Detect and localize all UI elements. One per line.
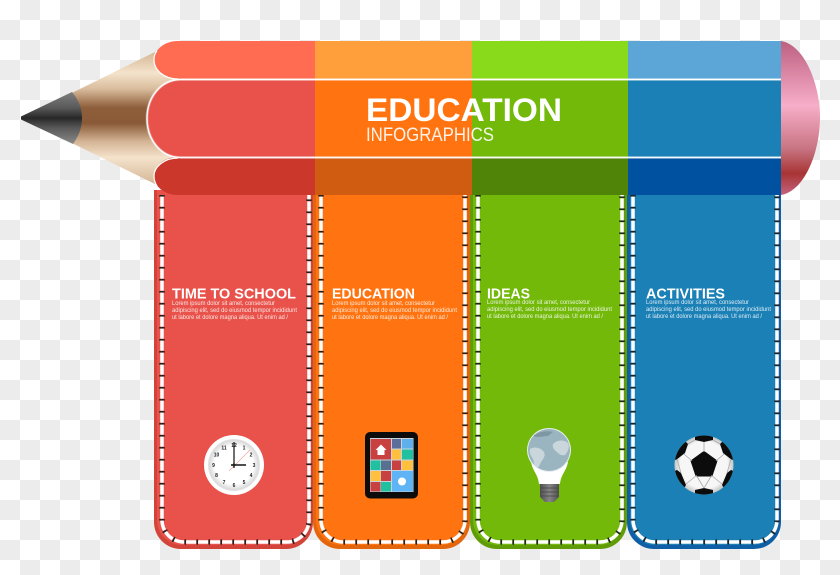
icon: clock: 11 xyxy=(221,446,227,452)
text block: orange card body: Lorem ipsum dolor sit amet, consectetur xyxy=(332,300,436,307)
pencil tip xyxy=(21,51,175,185)
bottom band xyxy=(154,157,781,195)
pencil wood xyxy=(21,51,175,185)
panel: red card time to school xyxy=(154,190,313,549)
text block: green card body: ut labore et dolore magna aliqua. Ut enim ad / xyxy=(487,313,603,320)
top band xyxy=(154,41,781,79)
text block: red card body: adipiscing elit, sed do eiusmod tempor incididunt xyxy=(172,307,297,314)
icon: clock: 1 xyxy=(243,446,246,452)
heading: activities: ACTIVITIES xyxy=(646,286,725,302)
title xyxy=(366,92,562,146)
icon: clock: 5 xyxy=(243,480,246,486)
text block: orange card body xyxy=(332,300,457,321)
text block: green card body xyxy=(487,299,612,320)
icon: clock: 2 xyxy=(250,452,253,458)
pencil body bands xyxy=(147,41,781,195)
icon: clock: 4 xyxy=(250,473,253,479)
subtitle: INFOGRAPHICS xyxy=(366,124,494,146)
text block: red card body: Lorem ipsum dolor sit amet, consectetur xyxy=(172,300,276,307)
icon: clock: 12 xyxy=(231,443,237,449)
text block: red card body: ut labore et dolore magna aliqua. Ut enim ad / xyxy=(172,314,288,321)
icon: clock: 6 xyxy=(233,483,236,489)
panel: orange card education xyxy=(313,190,470,549)
icon: clock xyxy=(204,435,264,495)
icon: clock: 7 xyxy=(223,480,226,486)
text block: blue card body: Lorem ipsum dolor sit amet, consectetur xyxy=(646,299,750,306)
text block: orange card body: ut labore et dolore magna aliqua. Ut enim ad / xyxy=(332,314,448,321)
eraser xyxy=(781,41,820,195)
icon: tablet xyxy=(365,432,418,498)
heading: education: EDUCATION xyxy=(332,286,415,302)
title: EDUCATION xyxy=(366,92,562,128)
text block: blue card body: ut labore et dolore magna aliqua. Ut enim ad / xyxy=(646,313,762,320)
text block: green card body: adipiscing elit, sed do eiusmod tempor incididunt xyxy=(487,306,612,313)
panel: green card ideas xyxy=(470,190,627,549)
heading: time to school: TIME TO SCHOOL xyxy=(172,286,296,302)
text block: green card body: Lorem ipsum dolor sit amet, consectetur xyxy=(487,299,591,306)
text block: blue card body xyxy=(646,299,771,320)
icon: soccer ball xyxy=(674,436,734,494)
text block: blue card body: adipiscing elit, sed do eiusmod tempor incididunt xyxy=(646,306,771,313)
text block: orange card body: adipiscing elit, sed do eiusmod tempor incididunt xyxy=(332,307,457,314)
middle band xyxy=(147,80,781,157)
icon: clock: 10 xyxy=(214,452,219,458)
icon: clock: 8 xyxy=(215,473,218,479)
pencil graphite xyxy=(21,92,82,144)
heading: ideas: IDEAS xyxy=(487,286,530,302)
text block: red card body xyxy=(172,300,297,321)
icon: light bulb globe xyxy=(527,428,571,502)
panel: blue card activities xyxy=(627,190,781,549)
icon: clock: 3 xyxy=(253,463,256,469)
icon: clock: 9 xyxy=(212,463,215,469)
